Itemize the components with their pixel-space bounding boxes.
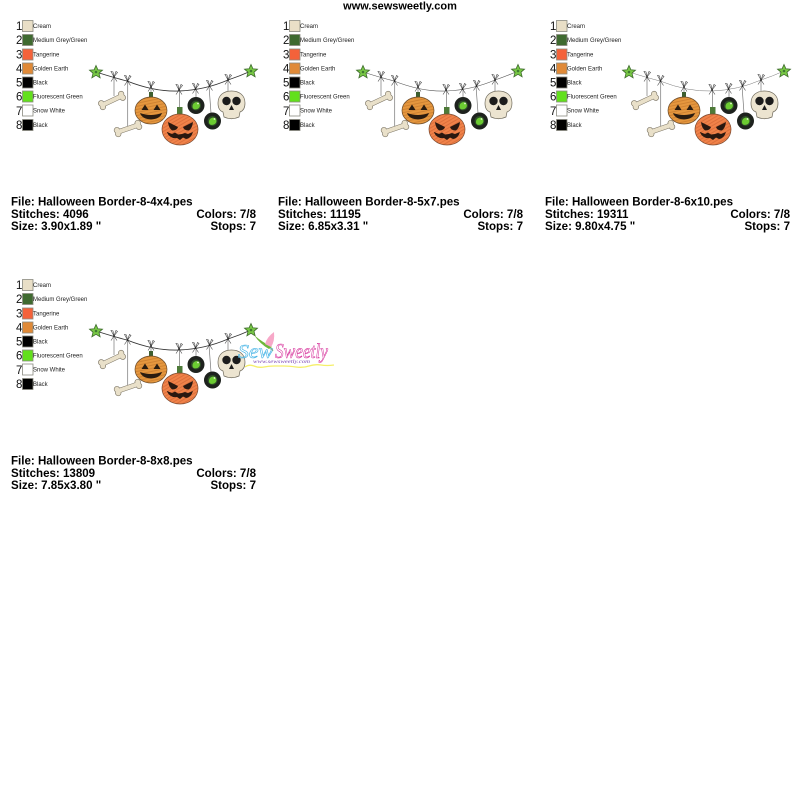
color legend: 4 xyxy=(16,64,23,76)
color legend: Tangerine xyxy=(300,52,327,58)
color legend: Black xyxy=(300,80,316,86)
file details: File: Halloween Border-8-6x10.pes xyxy=(545,196,733,208)
color legend: Tangerine xyxy=(33,52,60,58)
garland illustration xyxy=(356,64,524,145)
color legend: 1 xyxy=(16,21,22,33)
color legend: Golden Earth xyxy=(33,326,68,332)
file details: Colors: 7/8 xyxy=(463,209,524,221)
icon: hummingbird xyxy=(254,332,274,351)
panel: 8x8 design xyxy=(11,280,258,492)
file details xyxy=(278,196,524,233)
panel: 4x4 design xyxy=(11,20,258,233)
color legend: Golden Earth xyxy=(567,66,602,72)
color legend: 1 xyxy=(16,280,22,292)
logo: Sew Sweetly: Sweetly xyxy=(275,339,329,363)
file details: File: Halloween Border-8-8x8.pes xyxy=(11,456,193,468)
color legend: 5 xyxy=(16,78,22,90)
file details: Stops: 7 xyxy=(477,221,523,233)
garland illustration xyxy=(622,64,790,145)
color legend: Black xyxy=(33,123,49,129)
file details: Size: 6.85x3.31 " xyxy=(278,221,368,233)
color legend: 4 xyxy=(16,322,23,334)
file details: Stitches: 13809 xyxy=(11,468,95,480)
file details: Colors: 7/8 xyxy=(730,209,791,221)
color legend: 2 xyxy=(16,294,22,306)
color legend: 2 xyxy=(283,35,289,47)
color legend: 8 xyxy=(283,120,289,132)
color legend: 7 xyxy=(16,106,22,118)
file details: Stitches: 19311 xyxy=(545,209,629,221)
color legend: 8 xyxy=(16,379,22,391)
color legend: 6 xyxy=(16,92,22,104)
file details: Colors: 7/8 xyxy=(196,468,257,480)
color legend: Snow White xyxy=(567,108,600,114)
color legend: 4 xyxy=(550,64,557,76)
file details: Stops: 7 xyxy=(210,221,256,233)
color legend: 4 xyxy=(283,64,290,76)
color legend: 1 xyxy=(550,21,556,33)
color legend: 1 xyxy=(283,21,289,33)
color legend: 7 xyxy=(550,106,556,118)
file details: Size: 9.80x4.75 " xyxy=(545,221,635,233)
color legend: Cream xyxy=(300,24,318,30)
color legend: Black xyxy=(33,340,49,346)
garland illustration xyxy=(90,324,258,404)
logo: Sew Sweetly xyxy=(238,332,334,367)
color legend xyxy=(283,20,354,132)
garland illustration xyxy=(90,64,258,145)
panel: 6x10 design xyxy=(545,20,791,233)
color legend: 6 xyxy=(16,350,22,362)
color legend: 2 xyxy=(550,35,556,47)
color legend xyxy=(16,20,87,132)
color legend: Tangerine xyxy=(33,312,60,318)
color legend: Golden Earth xyxy=(300,66,335,72)
color legend: Fluorescent Green xyxy=(33,94,83,100)
color legend: 8 xyxy=(550,120,556,132)
color legend: Black xyxy=(33,382,49,388)
color legend xyxy=(16,280,87,391)
color legend: Black xyxy=(567,123,583,129)
color legend: 7 xyxy=(16,365,22,377)
file details: Stops: 7 xyxy=(210,480,256,492)
site url header: www.sewsweetly.com xyxy=(342,0,457,12)
file details xyxy=(11,196,257,233)
color legend: Snow White xyxy=(300,108,333,114)
color legend xyxy=(550,20,621,132)
color legend: 6 xyxy=(550,92,556,104)
color legend: 5 xyxy=(550,78,556,90)
file details: Stitches: 4096 xyxy=(11,209,89,221)
color legend: Cream xyxy=(33,283,51,289)
color legend: Black xyxy=(33,80,49,86)
color legend: 3 xyxy=(16,308,22,320)
color legend: Fluorescent Green xyxy=(300,94,350,100)
color legend: Black xyxy=(567,80,583,86)
color legend: Black xyxy=(300,123,316,129)
color legend: Fluorescent Green xyxy=(567,94,617,100)
file details: File: Halloween Border-8-5x7.pes xyxy=(278,196,460,208)
logo: Sew Sweetly: Sew xyxy=(238,341,274,363)
color legend: 5 xyxy=(283,78,289,90)
color legend: Medium Grey/Green xyxy=(300,38,354,44)
color legend: Snow White xyxy=(33,108,66,114)
file details xyxy=(11,456,257,492)
color legend: 8 xyxy=(16,120,22,132)
color legend: Cream xyxy=(33,24,51,30)
color legend: Medium Grey/Green xyxy=(33,38,87,44)
color legend: Fluorescent Green xyxy=(33,354,83,360)
file details: Stitches: 11195 xyxy=(278,209,361,221)
color legend: 2 xyxy=(16,35,22,47)
color legend: 3 xyxy=(16,50,22,62)
color legend: 3 xyxy=(550,50,556,62)
color legend: Medium Grey/Green xyxy=(33,297,87,303)
color legend: 7 xyxy=(283,106,289,118)
file details: Colors: 7/8 xyxy=(196,209,257,221)
color legend: 5 xyxy=(16,336,22,348)
panel: 5x7 design xyxy=(278,20,524,233)
file details: File: Halloween Border-8-4x4.pes xyxy=(11,196,193,208)
color legend: 6 xyxy=(283,92,289,104)
color legend: Golden Earth xyxy=(33,66,68,72)
color legend: Snow White xyxy=(33,368,66,374)
color legend: 3 xyxy=(283,50,289,62)
logo: Sew Sweetly: www.sewsweetly.com xyxy=(253,359,310,365)
color legend: Tangerine xyxy=(567,52,594,58)
color legend: Cream xyxy=(567,24,585,30)
file details: Size: 3.90x1.89 " xyxy=(11,221,101,233)
file details: Stops: 7 xyxy=(744,221,790,233)
file details xyxy=(545,196,791,233)
file details: Size: 7.85x3.80 " xyxy=(11,480,101,492)
color legend: Medium Grey/Green xyxy=(567,38,621,44)
